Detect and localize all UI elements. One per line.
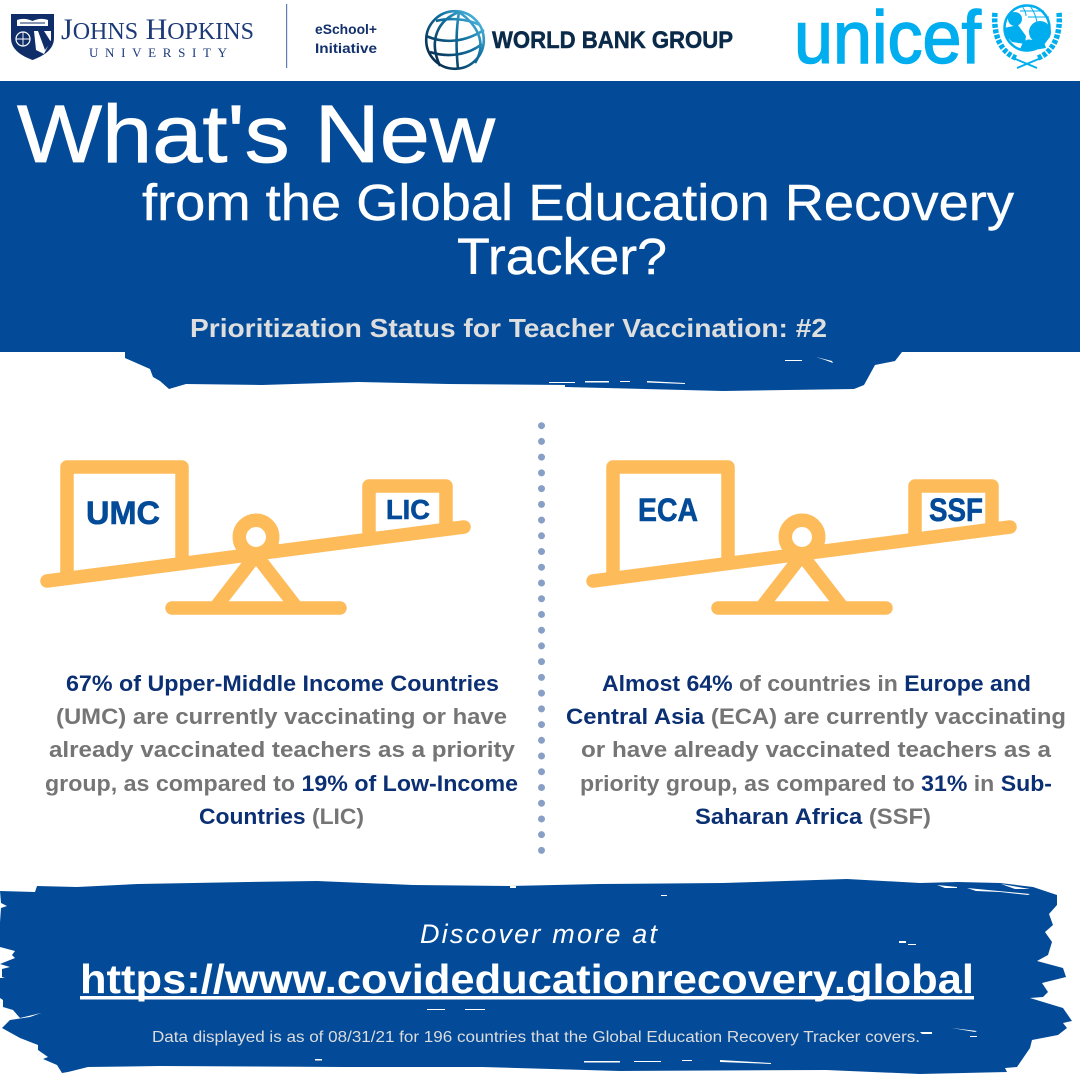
panel: title banner: [0, 81, 1080, 391]
logo: eSchool+ Initiative: [315, 21, 377, 56]
wordmark: Johns Hopkins: JOHNS HOPKINS: [61, 13, 254, 46]
section label: Prioritization Status for Teacher Vaccination: #2: [190, 313, 827, 343]
text block: ECA vs SSF: Saharan Africa (SSF): [695, 804, 931, 829]
text block: ECA vs SSF: Almost 64% of countries in Europe and: [602, 671, 1031, 696]
text block: UMC vs LIC: group, as compared to 19% of Low-Income: [45, 771, 518, 796]
text block: ECA vs SSF: Central Asia (ECA) are currently vaccinating: [566, 704, 1066, 729]
text block: UMC vs LIC: already vaccinated teachers as a priority: [49, 737, 516, 762]
icon: balance scale UMC vs LIC: [47, 467, 464, 608]
logo: eSchool+ Initiative: eSchool+: [315, 21, 377, 37]
wordmark: World Bank Group: WORLD BANK GROUP: [492, 27, 733, 54]
icon: balance scale UMC vs LIC: UMC: [86, 495, 160, 531]
logo: UNICEF: [794, 0, 1059, 79]
icon: balance scale ECA vs SSF: SSF: [929, 492, 983, 528]
subtitle line 1: from the Global Education Recovery: [142, 174, 1015, 231]
icon: World Bank globe: [426, 11, 484, 69]
icon: balance scale ECA vs SSF: [593, 467, 1010, 608]
text block: ECA vs SSF: [566, 671, 1066, 829]
text block: UMC vs LIC: (UMC) are currently vaccinating or have: [56, 704, 507, 729]
data note: Data displayed is as of 08/31/21 for 196 countries that the Global Education Recovery Tracker covers.: [152, 1029, 920, 1046]
logo: Johns Hopkins University: [11, 13, 254, 60]
icon: university shield: [11, 14, 54, 60]
call to action text: Discover more at: [420, 919, 658, 949]
text block: UMC vs LIC: Countries (LIC): [199, 804, 364, 829]
icon: balance scale ECA vs SSF: ECA: [638, 492, 698, 528]
call to action brush stroke: [0, 879, 1072, 1074]
text block: ECA vs SSF: or have already vaccinated teachers as a: [581, 737, 1052, 762]
divider between logos: [286, 4, 287, 68]
wordmark: University: UNIVERSITY: [89, 45, 228, 60]
banner brush stroke: [0, 81, 1080, 391]
panel: call to action: [0, 879, 1072, 1074]
text block: UMC vs LIC: [45, 671, 518, 829]
text block: UMC vs LIC: 67% of Upper-Middle Income Countries: [66, 671, 499, 696]
brush flecks: [315, 884, 1030, 1064]
title: What's New: [17, 89, 496, 180]
brush flecks: [549, 357, 833, 384]
text block: ECA vs SSF: priority group, as compared to 31% in Sub-: [580, 771, 1052, 796]
icon: balance scale UMC vs LIC: LIC: [386, 494, 430, 525]
dotted vertical divider: [538, 426, 545, 851]
subtitle line 2: Tracker?: [457, 228, 667, 285]
logo: World Bank Group: [426, 11, 733, 69]
website link: https://www.covideducationrecovery.global: [80, 956, 974, 1002]
icon: UNICEF emblem: [995, 6, 1059, 68]
logo: eSchool+ Initiative: Initiative: [315, 40, 377, 56]
